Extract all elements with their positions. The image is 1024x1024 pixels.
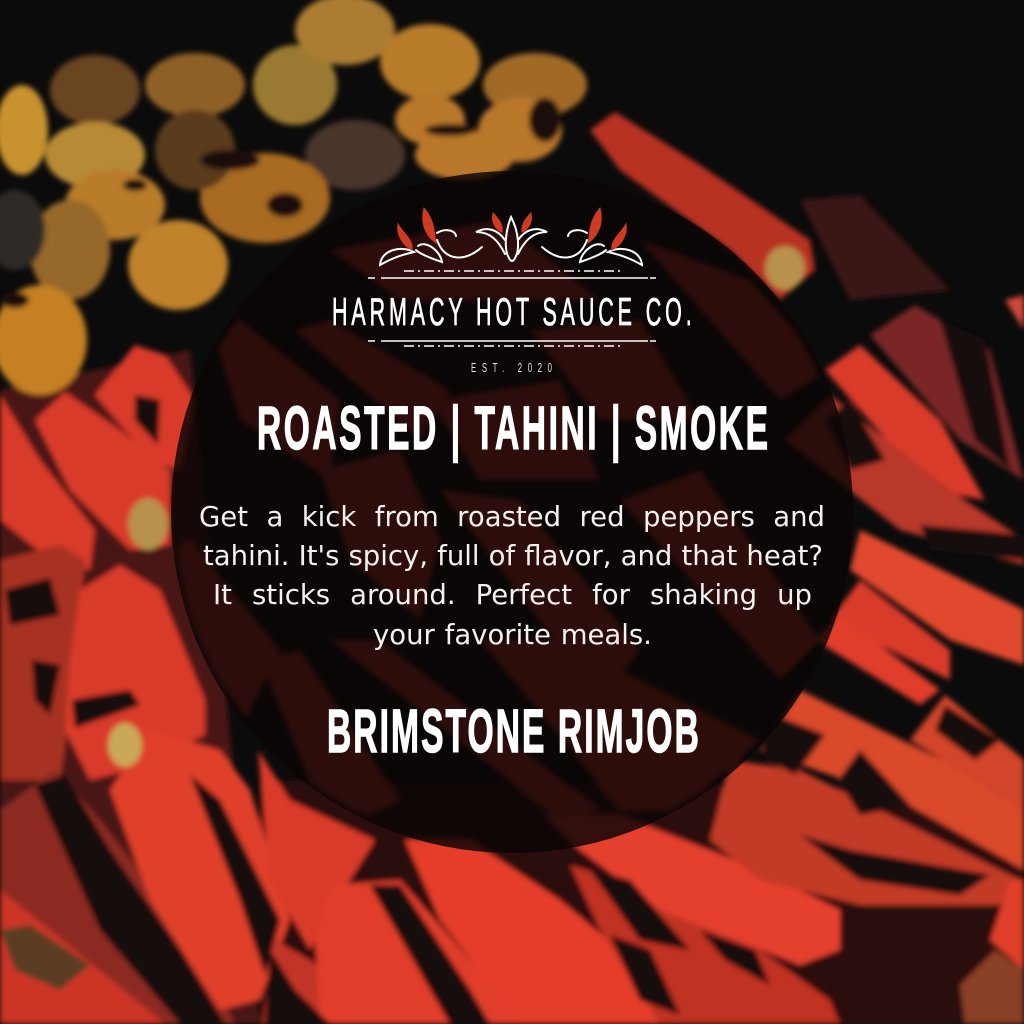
- brand name: HARMACY HOT SAUCE CO.: [332, 290, 692, 334]
- logo rules: [368, 271, 656, 346]
- description text: Get a kick from roasted red peppers and: [199, 501, 825, 533]
- description text: It sticks around. Perfect for shaking up: [213, 579, 812, 611]
- charred patches: [5, 320, 1024, 1024]
- logo ornament: [380, 208, 642, 265]
- peppers dim under circle: [160, 220, 830, 830]
- product name: BRIMSTONE RIMJOB: [327, 697, 699, 766]
- flavor heading: ROASTED | TAHINI | SMOKE: [257, 394, 768, 464]
- description text: tahini. It's spicy, full of flavor, and that heat?: [203, 540, 823, 572]
- description text: your favorite meals.: [373, 619, 652, 651]
- established date: EST. 2020: [471, 361, 552, 376]
